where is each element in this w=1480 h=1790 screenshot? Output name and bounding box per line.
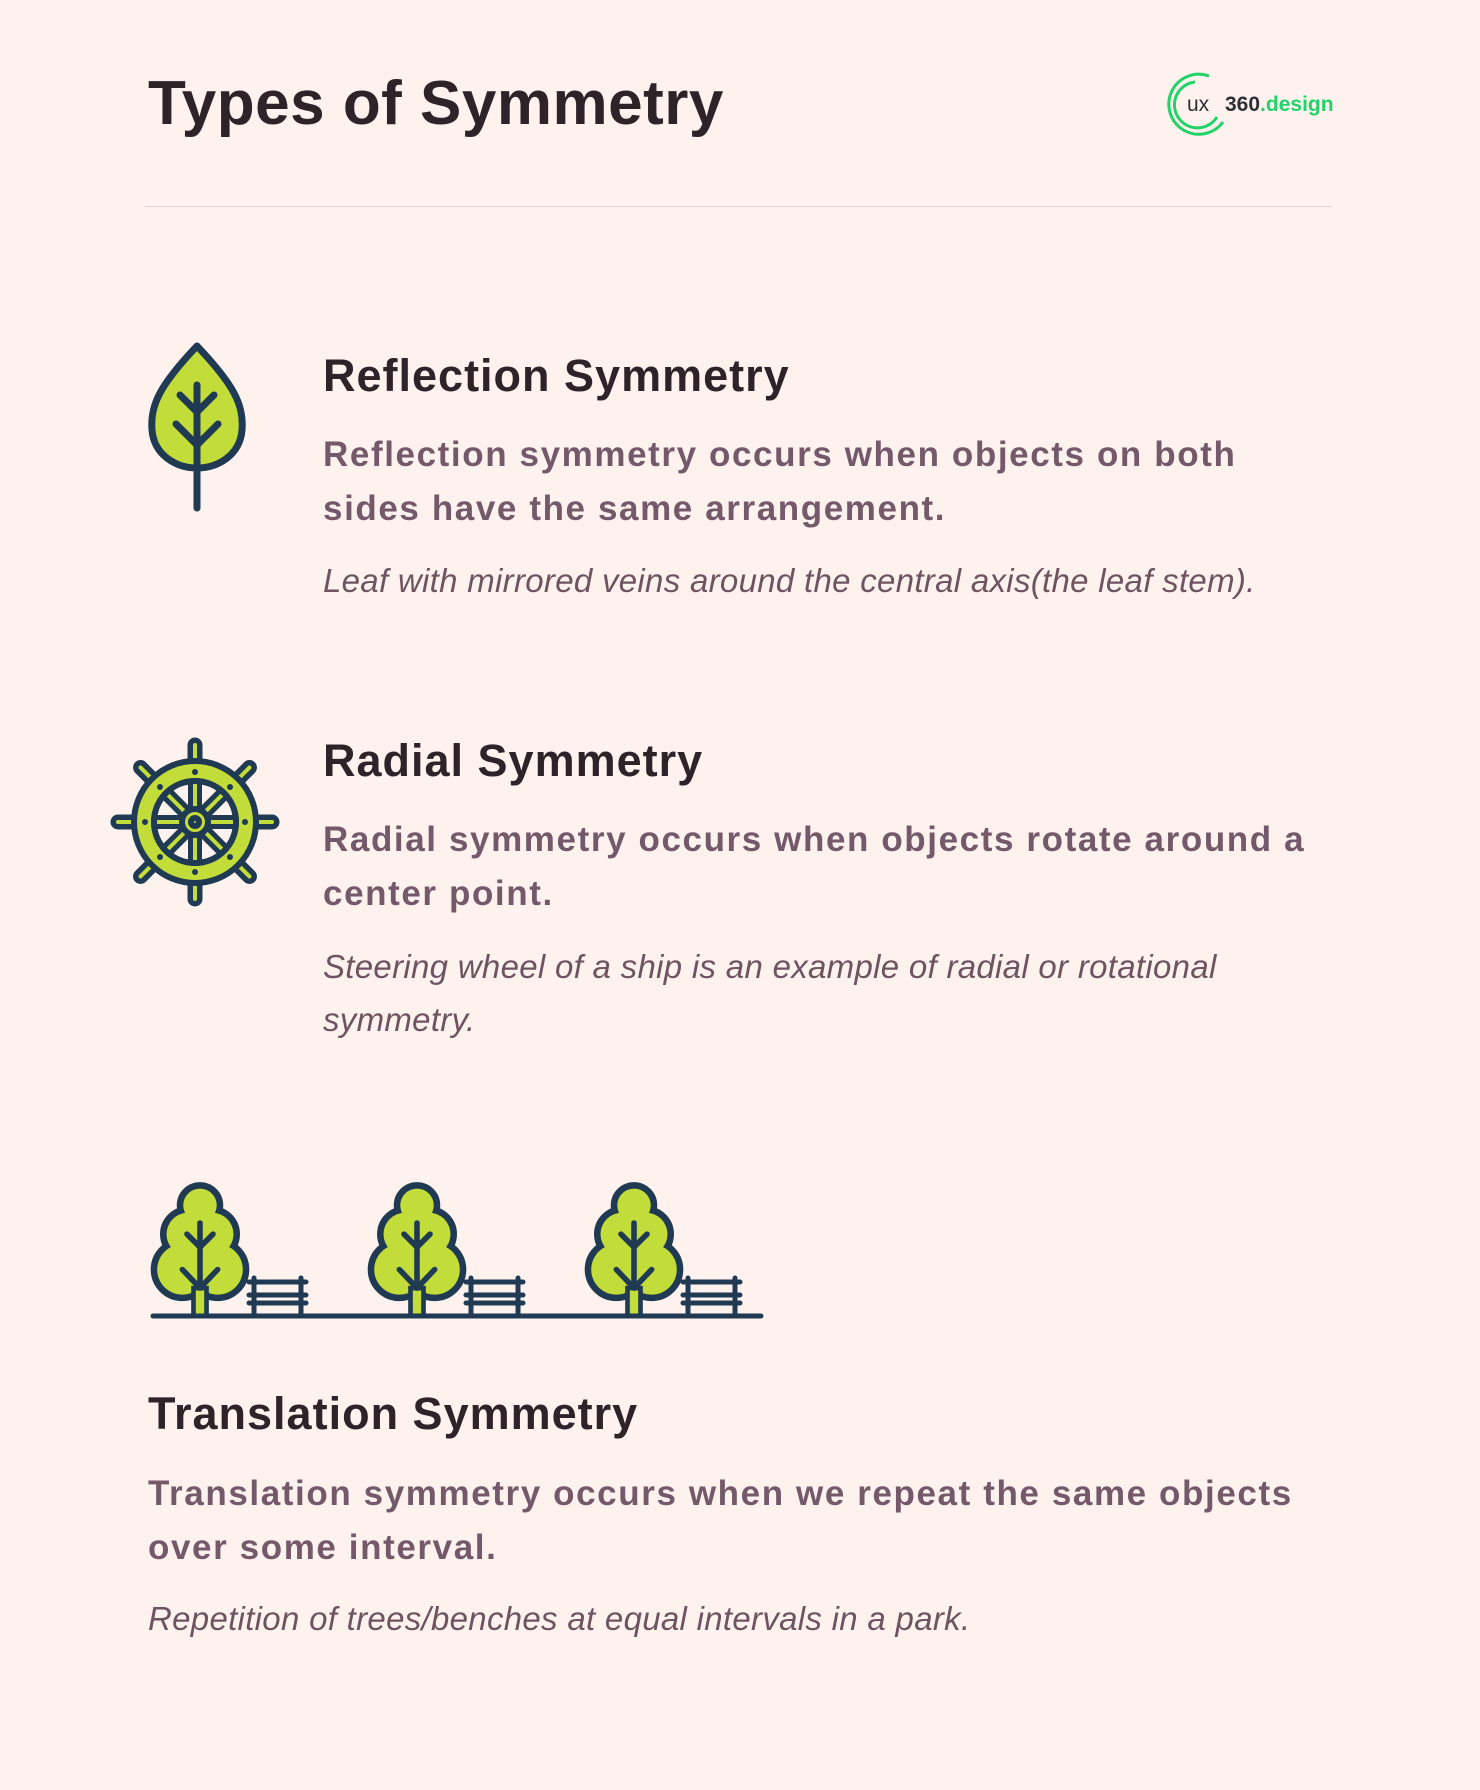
heading: reflection: Reflection Symmetry <box>323 350 790 401</box>
text: radial example: Steering wheel of a ship is an example of radial or rotational <box>323 948 1217 985</box>
icon: leaf <box>148 342 246 512</box>
text: reflection body: Reflection symmetry occurs when objects on both <box>323 435 1236 474</box>
icon: trees and benches <box>150 1182 764 1318</box>
heading: translation: Translation Symmetry <box>148 1388 638 1439</box>
text: translation body <box>148 1474 1293 1567</box>
text: radial example <box>323 948 1217 1038</box>
text: reflection example: Leaf with mirrored veins around the central axis(the leaf stem). <box>323 562 1256 599</box>
text: radial body: Radial symmetry occurs when objects rotate around a <box>323 820 1305 859</box>
icon: ship wheel <box>110 738 280 906</box>
logo <box>1167 72 1334 136</box>
logo: ux <box>1187 93 1210 116</box>
text: radial body: center point. <box>323 874 554 913</box>
text: radial example: symmetry. <box>323 1001 475 1038</box>
text: reflection body: sides have the same arrangement. <box>323 489 946 528</box>
logo: 360.design <box>1225 93 1334 116</box>
text: radial body <box>323 820 1305 913</box>
text: translation example: Repetition of trees/benches at equal intervals in a park. <box>148 1600 970 1637</box>
text: translation body: over some interval. <box>148 1528 497 1567</box>
text: reflection body <box>323 435 1236 528</box>
text: translation body: Translation symmetry occurs when we repeat the same objects <box>148 1474 1293 1513</box>
title: Types of Symmetry <box>148 69 724 138</box>
heading: radial: Radial Symmetry <box>323 735 703 786</box>
